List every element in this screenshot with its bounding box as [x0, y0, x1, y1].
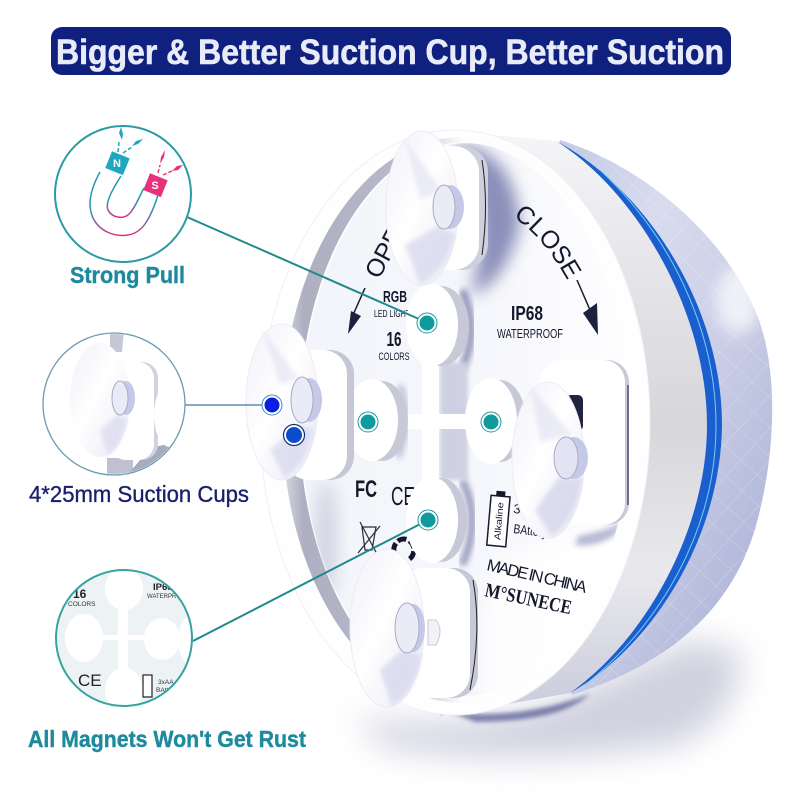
icon: horseshoe magnet: N [113, 158, 121, 170]
callout: strong pull [55, 126, 191, 262]
printed label: IP68 waterproof: IP68 [511, 303, 543, 325]
leader line: magnets [193, 520, 428, 641]
background shadow under product [340, 640, 740, 758]
marker dots: magnets [358, 313, 501, 530]
callout: magnets [55, 569, 193, 707]
printed label: CLOSE arrow: CLOSE [517, 206, 582, 280]
title banner: Bigger & Better Suction Cup, Better Suction [56, 33, 724, 72]
magnet disc: left [346, 379, 408, 461]
magnet disc: right [465, 378, 526, 464]
callout circle: magnet close-up: 3xAA [158, 679, 174, 686]
suction cup: bottom [350, 549, 478, 707]
icon: crossed bin [358, 522, 380, 556]
printed label: CLOSE arrow [517, 206, 598, 335]
suction cup: top [386, 131, 488, 285]
callout: suction cups [43, 330, 186, 480]
textured back housing [500, 140, 772, 695]
printed label: RGB LED light: COLORS [378, 351, 410, 363]
callout circle: magnet close-up: COLORS [68, 601, 96, 608]
certification marks: FC [355, 476, 377, 503]
brand name: M°SUNECE [483, 579, 574, 619]
inner grey groove [282, 137, 642, 703]
printed label: IP68 waterproof: WATERPROOF [497, 326, 563, 341]
leader line: strong pull [187, 217, 428, 323]
callout circle: magnet close-up: BAttery [156, 687, 178, 694]
product body [260, 130, 772, 716]
icon: horseshoe magnet: S [151, 180, 159, 192]
label: suction cups size: 4*25mm Suction Cups [29, 481, 249, 507]
printed label: RGB LED light: LED LIGHT [374, 308, 410, 320]
callout circle: magnet close-up: WATERPROOF [147, 594, 190, 600]
printed label: OPEN arrow [348, 223, 409, 334]
front face [303, 142, 618, 620]
printed label: RGB LED light: 16 [386, 329, 402, 351]
battery icon and text: 3 [513, 501, 521, 517]
icon: horseshoe magnet [90, 127, 183, 235]
certification marks [355, 476, 415, 560]
made in china: MADE IN CHINA [485, 556, 589, 597]
printed label: OPEN arrow: OPE [360, 223, 409, 283]
magnet disc: top [406, 284, 469, 366]
label: magnets: All Magnets Won't Get Rust [28, 726, 306, 752]
blue seal ring [556, 141, 722, 693]
grey side band [440, 130, 707, 716]
marker dots: suction cups [262, 395, 304, 446]
battery icon and text [487, 490, 549, 547]
printed label: RGB LED light [374, 289, 410, 363]
white front rim [260, 130, 650, 715]
label: strong pull: Strong Pull [70, 262, 185, 288]
battery icon and text: BAttery [513, 521, 549, 540]
magnet cross connector [395, 360, 470, 484]
certification marks: CE [391, 481, 415, 511]
leader line: suction cups [185, 404, 272, 406]
printed label: RGB LED light: RGB [383, 289, 407, 306]
callout circle: magnet [55, 126, 191, 262]
suction cup: right [512, 360, 629, 538]
callout circle: magnet close-up: 16 [73, 587, 87, 601]
magnet disc: bottom [406, 477, 467, 563]
callout circle: magnet close-up: CE [78, 671, 102, 690]
suction cup: left [246, 324, 354, 480]
battery icon and text: Alkaline [492, 502, 506, 540]
icon: recycle [394, 539, 414, 560]
callout circle: magnet close-up [57, 572, 187, 703]
callout circle: cup close-up [71, 334, 172, 474]
callout circle: magnet close-up: IP68 [153, 582, 173, 593]
printed label: IP68 waterproof [497, 303, 563, 341]
